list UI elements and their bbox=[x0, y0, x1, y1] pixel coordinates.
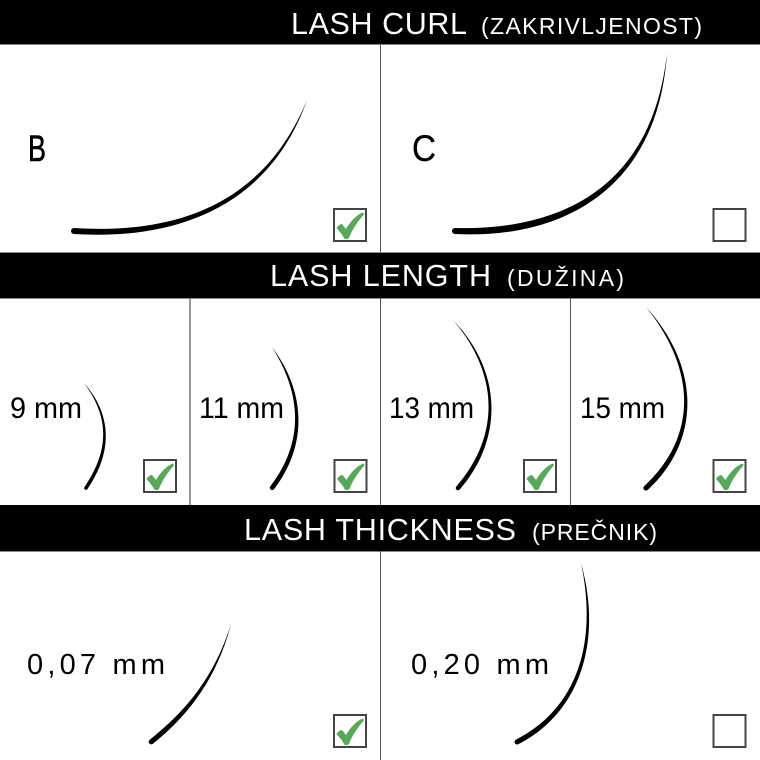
panel: thickness 0,20 mm bbox=[380, 551, 746, 760]
panel: length 15 mm bbox=[570, 298, 746, 505]
section header: lash length: LASH LENGTH bbox=[270, 259, 491, 293]
section header: lash thickness: LASH THICKNESS bbox=[244, 513, 516, 547]
section header: lash length bbox=[0, 252, 760, 299]
panel: length 15 mm: 15 mm bbox=[580, 392, 665, 425]
panel: length 13 mm: 13 mm bbox=[389, 392, 474, 425]
panel: curl B bbox=[28, 100, 366, 241]
section header: lash curl: (ZAKRIVLJENOST) bbox=[481, 13, 702, 39]
section header: lash thickness: (PREČNIK) bbox=[532, 518, 657, 545]
panel: length 9 mm bbox=[10, 383, 176, 492]
section header: lash thickness bbox=[0, 505, 760, 552]
panel: thickness 0,07 mm bbox=[27, 624, 366, 747]
section header: lash length: (DUŽINA) bbox=[507, 265, 624, 291]
panel: length 11 mm: 11 mm bbox=[199, 392, 284, 425]
panel: length 9 mm: 9 mm bbox=[10, 392, 82, 425]
panel: curl C bbox=[380, 44, 746, 253]
panel: length 13 mm bbox=[380, 298, 556, 505]
panel: curl B: B bbox=[28, 128, 46, 169]
section header: lash curl bbox=[0, 0, 760, 45]
section header: lash curl: LASH CURL bbox=[291, 7, 467, 41]
panel: length 11 mm bbox=[190, 298, 366, 505]
panel: thickness 0,07 mm: 0,07 mm bbox=[27, 649, 165, 681]
panel: curl C: C bbox=[412, 128, 436, 169]
panel: thickness 0,20 mm: 0,20 mm bbox=[411, 649, 549, 681]
